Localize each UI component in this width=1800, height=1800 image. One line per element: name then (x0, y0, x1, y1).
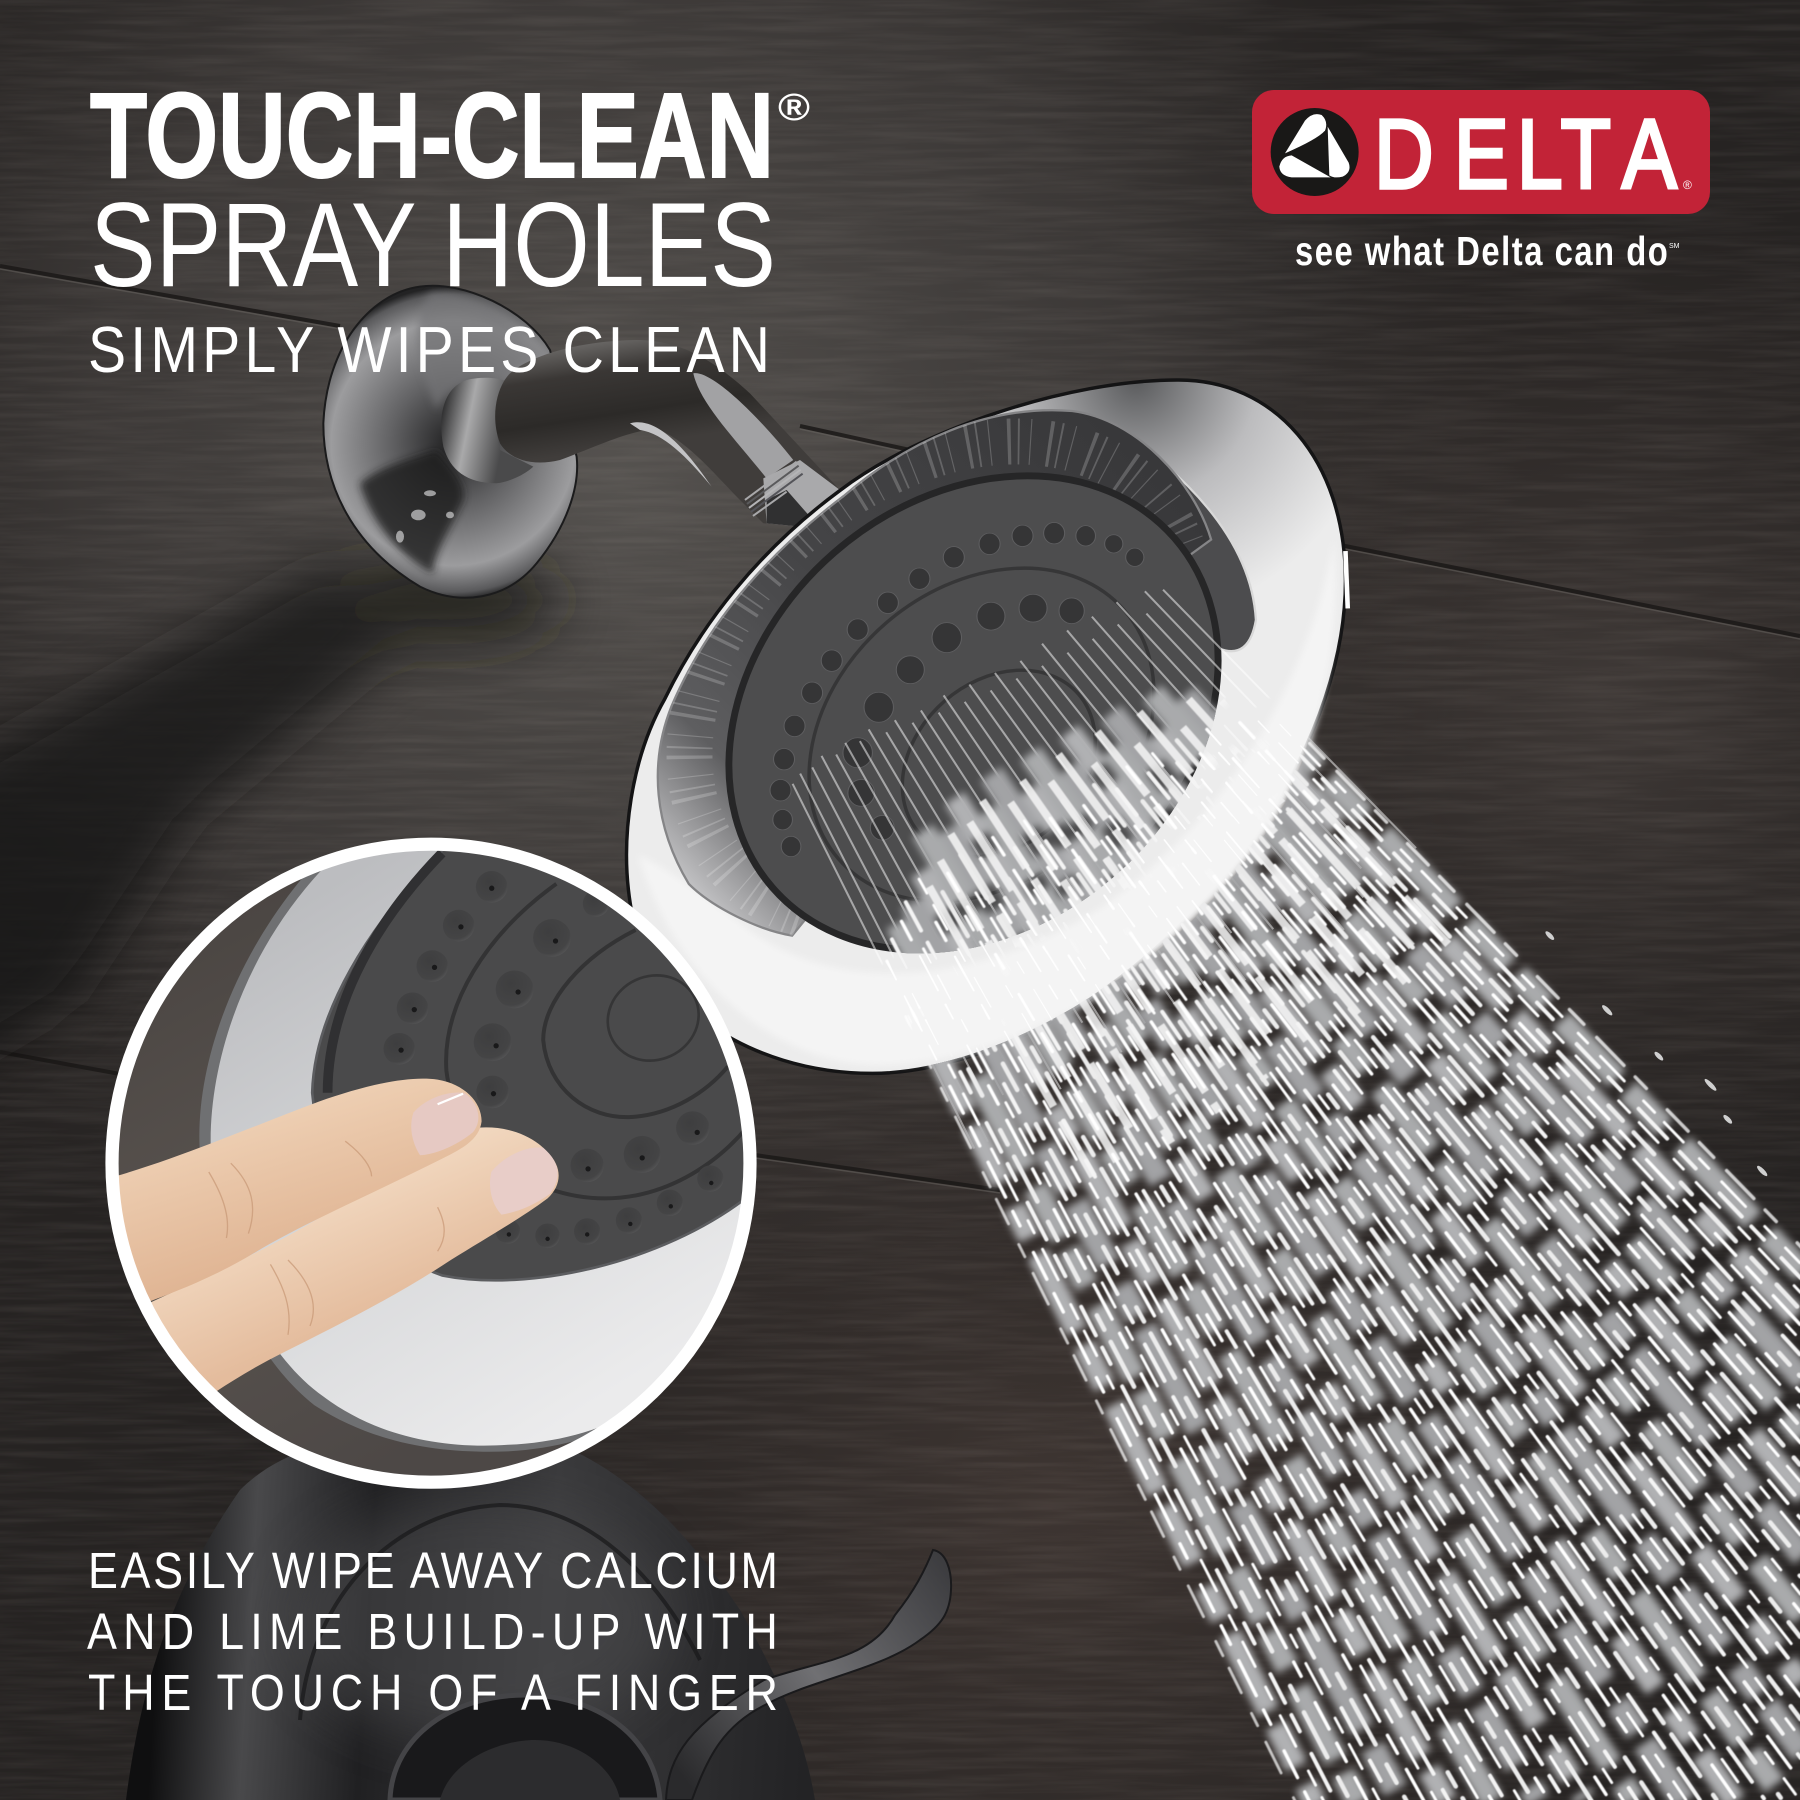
inset wall (118, 880, 574, 1476)
ring soft white (638, 540, 1336, 1065)
bright broken droplet streaks (887, 721, 1800, 1800)
red badge (1252, 90, 1710, 214)
service mark: SM (1669, 243, 1680, 250)
registered mark: ® (1683, 178, 1692, 192)
inset inner groove (543, 930, 728, 1117)
inset outer groove (446, 884, 750, 1198)
knob gloss (440, 1740, 620, 1800)
inset nozzles (383, 871, 724, 1248)
inset white border (112, 844, 750, 1482)
shower arm and wall flange (323, 286, 840, 598)
flange collar (441, 378, 533, 483)
description text: AND LIME BUILD-UP WITH (87, 1604, 778, 1661)
grey spray face (633, 378, 1314, 1048)
description text: EASILY WIPE AWAY CALCIUM (88, 1543, 778, 1600)
flange dark lower reflection (360, 450, 464, 573)
inset white head ring (211, 842, 750, 1446)
blurred water clusters (892, 693, 1800, 1800)
inset circle: finger wiping spray holes (90, 838, 780, 1489)
subtitle: SIMPLY WIPES CLEAN (88, 314, 770, 386)
arm silver highlight (693, 373, 793, 478)
inset face rim band (328, 853, 442, 1093)
chrome crescent behind the spray face (1165, 465, 1256, 651)
delta mark (1271, 108, 1359, 196)
water flecks on band (666, 418, 1202, 936)
inset centre logo oval (606, 974, 700, 1062)
head outer ring (627, 380, 1345, 1073)
upper nail glint (438, 1094, 463, 1104)
shower head (594, 343, 1348, 1073)
inset chrome rim (199, 871, 596, 1452)
trim centre highlight (290, 1500, 670, 1740)
stray droplets at spray edge (1544, 930, 1769, 1177)
description text (87, 1543, 778, 1722)
wall flange (323, 286, 577, 598)
knob (390, 1695, 660, 1800)
thin streams leaving the nozzles (793, 590, 1416, 1149)
Delta logo badge (1252, 90, 1710, 214)
neck thread (745, 462, 803, 516)
shadow of the shower arm on the wall (0, 555, 560, 1100)
spray face groove outer (742, 500, 1221, 970)
upper finger (108, 1079, 482, 1313)
registered mark: ® (778, 87, 810, 129)
spray nozzle dots (770, 522, 1144, 857)
rim highlight (1345, 551, 1348, 608)
lower finger (134, 1127, 559, 1392)
title: Touch-Clean: TOUCH-CLEAN (90, 67, 774, 203)
curved arm (495, 340, 840, 527)
knuckle creases (209, 1141, 444, 1335)
trim engraved arc (300, 1505, 700, 1720)
neck (763, 460, 840, 527)
flange water glints (396, 490, 454, 543)
title: Spray Holes: SPRAY HOLES (90, 178, 776, 312)
flange upper reflection (417, 293, 547, 410)
mid streams over the spray face (929, 699, 1448, 1176)
neck shadow (767, 490, 810, 527)
lever handle (666, 1550, 951, 1800)
inset tile lines (90, 1066, 780, 1157)
tagline: see what Delta can do (1295, 227, 1668, 274)
lower fingernail (490, 1148, 558, 1215)
arm droplet reflection (630, 422, 712, 487)
inset nozzle holes (398, 886, 713, 1241)
trim plate (126, 1430, 815, 1800)
glossy band around the face (658, 410, 1211, 936)
valve trim plate and handle (126, 1430, 951, 1800)
DELTA wordmark: DELTA (1374, 100, 1677, 210)
inset spray face (312, 838, 759, 1280)
upper fingernail (411, 1092, 478, 1155)
water spray (793, 590, 1800, 1800)
spray face groove inner (865, 632, 1133, 895)
description text: THE TOUCH OF A FINGER (88, 1665, 778, 1722)
